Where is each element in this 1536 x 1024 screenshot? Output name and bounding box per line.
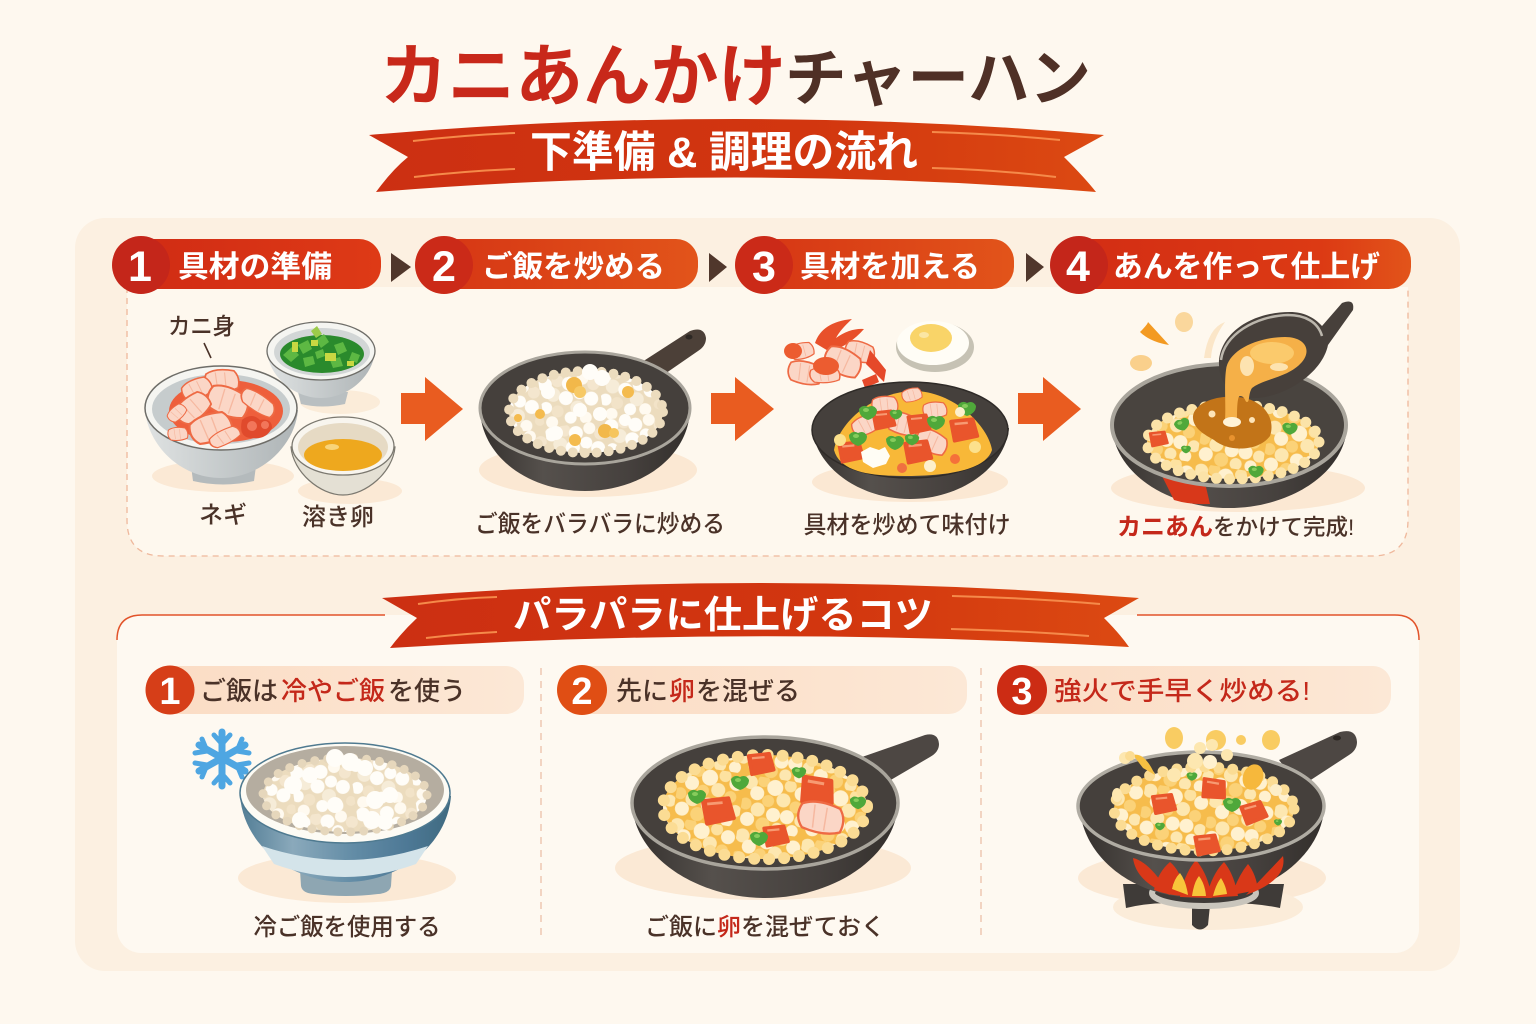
label: tip 2 caption: ご飯に (645, 914, 717, 941)
tip 2 header: を混ぜる (696, 676, 800, 706)
bottom ribbon banner (382, 583, 1139, 648)
label: crab meat: カニ身 (168, 313, 235, 339)
step 4 header (1050, 236, 1411, 294)
tip 2 header (557, 665, 967, 715)
label: step 3 caption: 具材を炒めて味付け (804, 512, 1010, 539)
tip 1 header: ご飯は (200, 676, 278, 706)
tip 1 header (146, 666, 524, 714)
panel: cooking steps frame (127, 287, 1408, 556)
label: tip 2 caption: を混ぜておく (741, 914, 885, 941)
top ribbon banner (369, 119, 1104, 192)
panel: tips (117, 615, 1419, 953)
label: beaten egg: 溶き卵 (302, 504, 374, 531)
tip 3 header (997, 665, 1391, 715)
label: step 2 caption: ご飯をバラバラに炒める (475, 511, 725, 538)
tip 2 header: 先に (616, 676, 668, 706)
tip 1 header: 1 (159, 671, 181, 713)
label: tip 2 caption: 卵 (717, 914, 741, 941)
label: green onion: ネギ (199, 502, 247, 529)
step 4 header: 4 (1066, 243, 1090, 291)
arrow: step 2 to 3 (711, 377, 774, 441)
top ribbon banner: 下準備 & 調理の流れ (530, 129, 918, 177)
tip 3 header: 強火で手早く炒める! (1054, 676, 1310, 706)
title: カニあんかけ (380, 39, 786, 115)
icon: crab meat bowl (145, 366, 298, 492)
icon: beaten egg bowl (291, 417, 402, 504)
tip 2 header: 卵 (669, 676, 695, 706)
tip 3 header: 3 (1011, 671, 1033, 713)
label: step 4 caption: をかけて完成! (1213, 515, 1354, 540)
tip 1 header: 冷やご飯 (281, 676, 385, 706)
divider: tips (541, 668, 981, 935)
step 3 header (735, 236, 1014, 294)
step 3 header: 具材を加える (800, 251, 980, 284)
icon: fried egg (896, 321, 974, 372)
bottom ribbon banner: パラパラに仕上げるコツ (513, 595, 933, 637)
step 2 header: ご飯を炒める (482, 250, 665, 284)
icon: wok over flame (1078, 727, 1357, 930)
icon: pan with egg rice (615, 734, 939, 900)
icon: pan with sauce being poured (1111, 302, 1365, 512)
arrow: step 3 to 4 (1018, 377, 1081, 441)
icon: rice bowl (238, 743, 456, 903)
step 2 header (415, 236, 698, 294)
icon: green onion bowl (267, 322, 380, 414)
icon: snowflake (195, 732, 249, 786)
step 1 header: 具材の準備 (178, 251, 332, 284)
step 1 header: 1 (128, 243, 152, 291)
label: crab meat (168, 313, 235, 358)
step 1 header (112, 236, 381, 294)
icon: pan with rice (479, 330, 706, 497)
title (380, 39, 1091, 115)
step 2 header: 2 (432, 243, 456, 291)
arrow: chevron 2 (709, 253, 727, 282)
arrow: chevron 1 (391, 253, 411, 282)
arrow: chevron 3 (1026, 253, 1044, 282)
icon: pan with crab and egg mix (812, 382, 1009, 502)
label: tip 1 caption: 冷ご飯を使用する (254, 914, 440, 941)
tip 2 header: 2 (571, 671, 593, 713)
icon: crab pieces pile (784, 319, 886, 388)
label: step 4 caption: カニあん (1117, 514, 1213, 541)
outer panel (75, 218, 1460, 971)
step 4 header: あんを作って仕上げ (1113, 251, 1380, 284)
title: チャーハン (785, 45, 1091, 114)
tip 1 header: を使う (388, 676, 466, 706)
step 3 header: 3 (752, 243, 776, 291)
arrow: step 1 to 2 (401, 377, 463, 441)
